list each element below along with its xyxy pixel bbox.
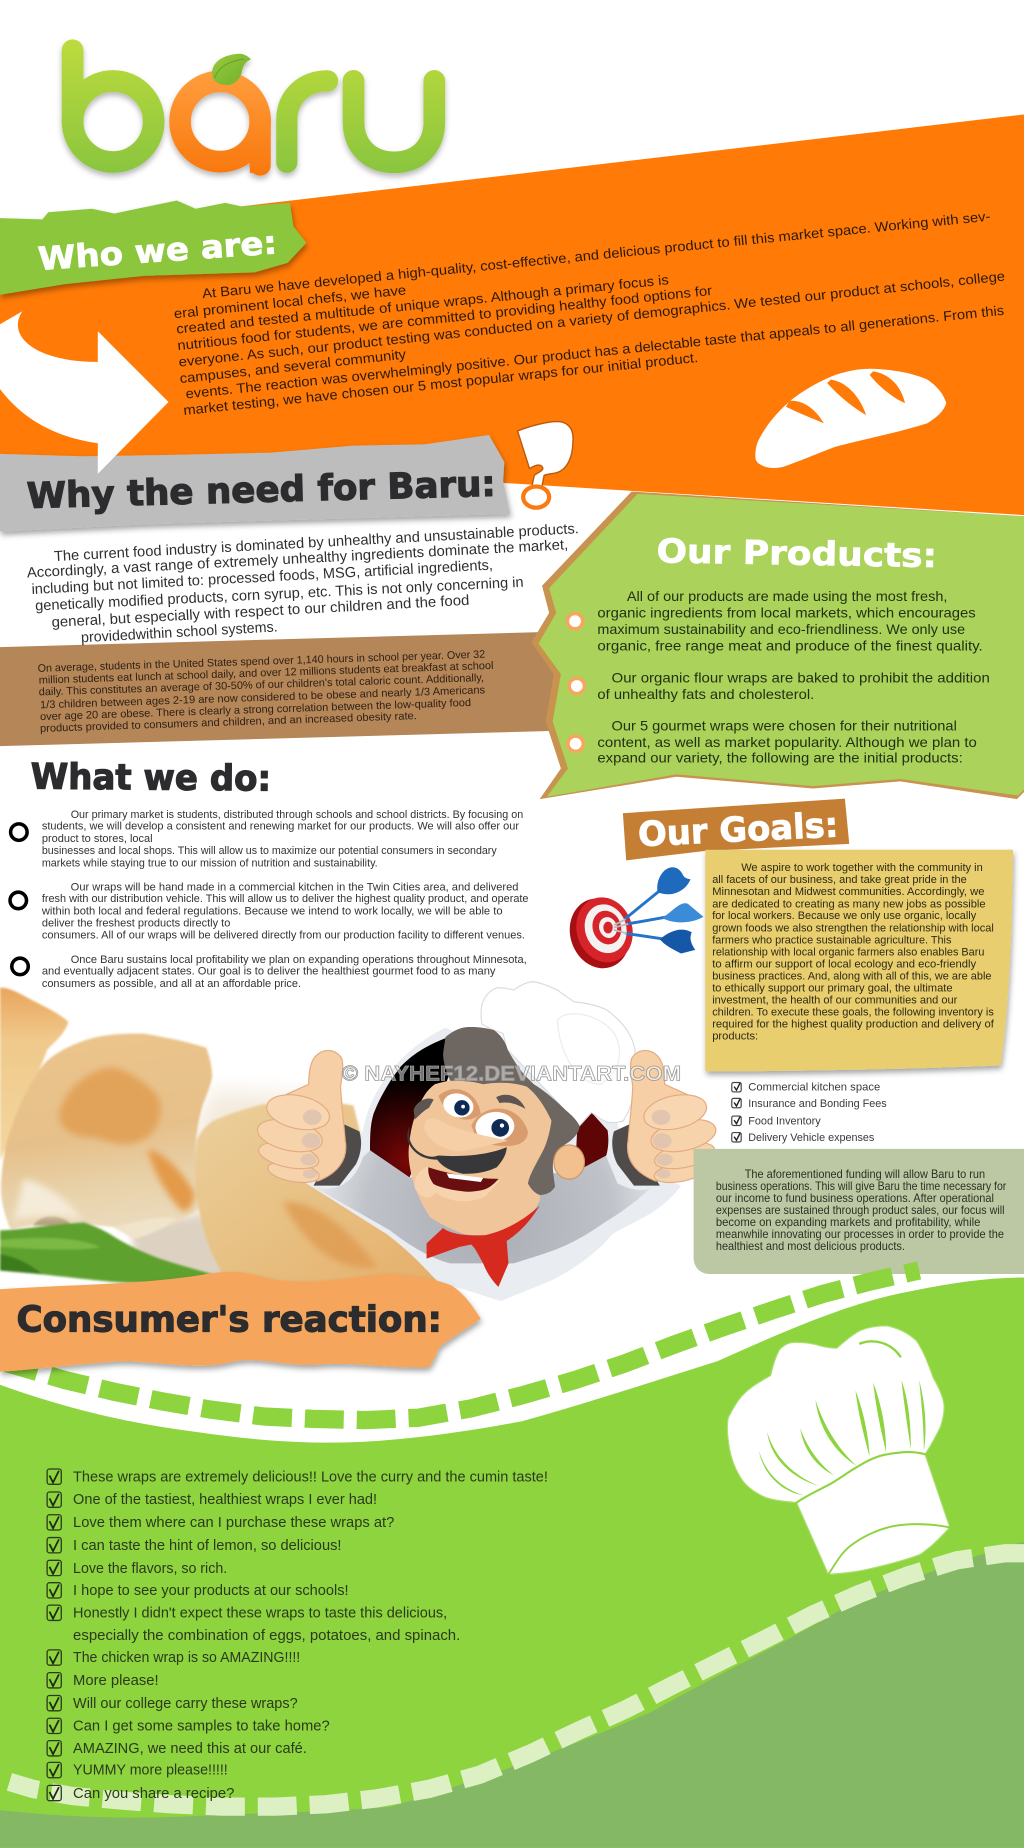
- text block: products body: Our 5 gourmet wraps were chosen for their nutritional: [612, 718, 957, 734]
- panel: funding note: [694, 1149, 1024, 1274]
- logo: Baru: [73, 50, 434, 173]
- panel: funding note: expenses are sustained through product sales, our focus will: [716, 1204, 1005, 1217]
- green dashed stitching: [0, 1270, 919, 1420]
- checklist: consumer quotes: Love them where can I purchase these wraps at?: [73, 1515, 394, 1531]
- heading: our products: Our Products:: [656, 531, 937, 575]
- checklist: consumer quotes: Love the flavors, so rich.: [73, 1561, 227, 1577]
- text block: who we are body: campuses, and several community: [179, 347, 407, 386]
- checklist: consumer quotes: YUMMY more please!!!!!: [73, 1763, 228, 1779]
- text block: products body: organic ingredients from local markets, which encourages: [597, 605, 976, 621]
- icon: chef hat: [727, 1326, 950, 1574]
- soft plate background: [130, 1090, 448, 1285]
- wrap two: [1, 1034, 212, 1237]
- text block: what we do body: businesses and local shops. This will allow us to maximize our potential consumers in secondary: [42, 845, 497, 857]
- heading tag: who we are: Who we are:: [37, 223, 278, 278]
- text block: products body: content, as well as market popularity. Although we plan to: [597, 734, 977, 750]
- lower dark green swoosh: [0, 1541, 1024, 1848]
- icon: bread loaf: [755, 369, 946, 468]
- chef hat: [481, 982, 635, 1126]
- panel: our goals note: all facets of our business, and take great pride in the: [712, 874, 967, 886]
- chef eyebrows: [414, 1095, 526, 1120]
- panel: brown statistics band: over age 20 are obese. There is clearly a strong correlation between the low-quality food: [40, 697, 471, 723]
- panel: funding note: meanwhile innovating our processes in order to provide the: [716, 1228, 1004, 1241]
- checklist: inventory: Delivery Vehicle expenses: [748, 1132, 875, 1144]
- text block: products body: All of our products are made using the most fresh,: [627, 588, 947, 604]
- text block: why the need body: providedwithin school systems.: [81, 619, 278, 646]
- panel: brown statistics band: products provided to consumers and children, and an increased obesity rate.: [40, 710, 417, 735]
- spinach leaf: [0, 1222, 217, 1283]
- panel: our goals note: to affirm our support of local ecology and eco-friendly: [712, 958, 976, 970]
- text block: products body: maximum sustainability and eco-friendliness. We only use: [597, 621, 965, 637]
- chef face: [409, 1077, 554, 1235]
- chef body halo: [304, 1028, 681, 1301]
- text block: why the need body: genetically modified products, corn syrup, etc. This is not only concerning in: [35, 575, 524, 615]
- heading: what we do: What we do:: [31, 756, 271, 800]
- panel: our goals note: We aspire to work together with the community in: [741, 862, 983, 874]
- browned patches on the wraps: [14, 1068, 377, 1268]
- checklist: inventory: Commercial kitchen space: [748, 1082, 880, 1094]
- panel: consumer's reaction wave: [0, 1270, 1024, 1848]
- heading tag: why the need for Baru: Why the need for Baru:: [26, 464, 496, 517]
- text block: who we are body: everyone. As such, our product testing was conducted on a variety of demographics. We tested our product at schools, college: [178, 269, 1006, 370]
- panel: our products: [531, 492, 1024, 799]
- panel: our goals note: to ethically support our primary goal, the ultimate: [712, 983, 953, 995]
- text block: who we are body: [173, 209, 1006, 418]
- text block: what we do body: Our wraps will be hand made in a commercial kitchen in the Twin Cities area, and delivered: [71, 881, 518, 893]
- text block: products body: expand our variety, the following are the initial products:: [597, 750, 963, 766]
- text block: what we do body: [41, 809, 528, 990]
- text block: products body: Our organic flour wraps are baked to prohibit the addition: [612, 669, 990, 685]
- text block: who we are body: events. The reaction was overwhelmingly positive. Our product has a delectable taste that appeals to all generations. From this: [185, 303, 1005, 401]
- checklist: inventory: Food Inventory: [748, 1115, 821, 1127]
- icon: white curved arrow: [0, 311, 169, 474]
- panel: our goals note: [705, 850, 1013, 1071]
- bullet rings: what we do: [10, 824, 28, 975]
- checklist: consumer quotes: especially the combination of eggs, potatoes, and spinach.: [73, 1628, 460, 1644]
- text block: what we do body: product to stores, local: [42, 833, 153, 845]
- heading tag: who we are: [0, 200, 306, 295]
- wrap one: [0, 988, 68, 1161]
- panel: funding note: become on expanding markets and profitability, while: [716, 1216, 980, 1229]
- panel: funding note: healthiest and most delicious products.: [716, 1240, 905, 1253]
- chef ear: [554, 1145, 584, 1179]
- left thumbs-up hand: [254, 1050, 361, 1186]
- panel: our goals note: are dedicated to creating as many new jobs as possible: [712, 898, 986, 910]
- icon: question mark: [518, 422, 573, 508]
- text block: what we do body: Our primary market is students, distributed through schools and school districts. By focusing on: [71, 809, 523, 821]
- checklist: consumer quotes: One of the tastiest, healthiest wraps I ever had!: [73, 1492, 377, 1508]
- panel: our goals note: Minnesotan and Midwest communities. Accordingly, we: [712, 886, 984, 898]
- text block: what we do body: consumers. All of our wraps will be delivered directly from our production facility to different venues.: [42, 930, 525, 942]
- checklist: inventory: [732, 1082, 887, 1144]
- text block: what we do body: within both local and federal regulations. Because we intend to work locally, we will be able to: [41, 906, 503, 918]
- panel: funding note: our income to fund business operations. After operational: [716, 1192, 994, 1205]
- pale dashed stitching: [9, 1553, 1024, 1807]
- text block: what we do body: markets while staying true to our mission of nutrition and sustainability.: [42, 857, 378, 869]
- panel: brown statistics band: [0, 632, 560, 746]
- panel: our goals note: products:: [712, 1031, 758, 1043]
- checklist: inventory: Insurance and Bonding Fees: [748, 1098, 887, 1110]
- text block: who we are body: nutritious food for students, we are committed to providing healthy food options for: [177, 283, 713, 353]
- text block: what we do body: Once Baru sustains local profitability we plan on expanding operations throughout Minnesota,: [71, 954, 527, 966]
- heading tag: consumer's reaction: Consumer's reaction:: [16, 1300, 442, 1341]
- checklist: consumer quotes: I can taste the hint of lemon, so delicious!: [73, 1538, 341, 1554]
- panel: our goals note: for local workers. Because we only use organic, locally: [712, 910, 976, 922]
- checklist: consumer quotes: Can I get some samples to take home?: [73, 1719, 330, 1735]
- panel: funding note: The aforementioned funding will allow Baru to run: [745, 1168, 985, 1181]
- right thumbs-up hand: [612, 1050, 719, 1186]
- checklist: consumer quotes: [47, 1469, 548, 1802]
- text block: products body: [597, 588, 990, 766]
- chef eye sockets: [438, 1089, 528, 1146]
- checklist: consumer quotes: I hope to see your products at our schools!: [73, 1583, 349, 1599]
- panel: brown statistics band: million students eat lunch at school daily, and over 12 millions students eat breakfast at school: [39, 660, 494, 687]
- panel: our goals note: investment, the health of our communities and our: [712, 994, 957, 1006]
- checklist: consumer quotes: The chicken wrap is so AMAZING!!!!: [73, 1650, 300, 1666]
- text block: what we do body: students, we will develop a consistent and renewing market for our products. We will also offer our: [42, 821, 519, 833]
- checklist: consumer quotes: Honestly I didn't expect these wraps to taste this delicious,: [73, 1605, 447, 1621]
- chef eyes: [441, 1090, 516, 1143]
- checklist: consumer quotes: More please!: [73, 1673, 159, 1689]
- icon: target with darts: [561, 867, 703, 976]
- heading tag: why the need for Baru: [0, 435, 510, 532]
- text block: what we do body: and eventually adjacent states. Our goal is to deliver the healthiest gourmet food to as many: [42, 966, 496, 978]
- checklist: consumer quotes: Will our college carry these wraps?: [73, 1696, 298, 1712]
- chef hair: [443, 1027, 580, 1195]
- wrap three: [195, 1102, 454, 1287]
- panel: our goals note: children. To execute these goals, the following inventory is: [712, 1007, 994, 1019]
- text block: what we do body: deliver the freshest products directly to: [42, 917, 230, 929]
- chef neckerchief: [427, 1206, 540, 1287]
- text block: why the need body: Accordingly, a vast range of extremely unhealthy ingredients dominate the market,: [26, 537, 569, 582]
- text block: why the need body: The current food industry is dominated by unhealthy and unsustainable products.: [54, 521, 579, 565]
- panel: our goals note: farmers who practice sustainable agriculture. This: [712, 934, 952, 946]
- checklist: consumer quotes: AMAZING, we need this at our café.: [73, 1741, 307, 1757]
- text block: what we do body: consumers as possible, and all at an affordable price.: [42, 978, 301, 990]
- text block: why the need body: [26, 521, 579, 646]
- illustration: chef giving thumbs up: [254, 982, 719, 1301]
- text block: why the need body: general, but especially with respect to our children and the food: [51, 593, 470, 631]
- panel: our goals note: relationship with local organic farmers also enables Baru: [712, 947, 984, 959]
- panel: brown statistics band: daily. This constitutes an average of 30-50% of our children's total caloric count. Additionally,: [39, 672, 484, 698]
- checklist: consumer quotes: Can you share a recipe?: [73, 1786, 234, 1802]
- panel: who we are (orange band): [0, 114, 1024, 515]
- heading tag: our goals: Our Goals:: [637, 805, 839, 855]
- heading tag: consumer's reaction: [0, 1272, 481, 1372]
- chef mouth: [415, 1167, 500, 1201]
- text block: products body: of unhealthy fats and cholesterol.: [597, 686, 814, 702]
- chef mustache: [407, 1127, 507, 1174]
- text block: who we are body: market testing, we have chosen our 5 most popular wraps for our initial product.: [183, 350, 699, 418]
- checklist: consumer quotes: These wraps are extremely delicious!! Love the curry and the cumin taste!: [73, 1469, 548, 1485]
- text block: what we do body: fresh with our distribution vehicle. This will allow us to deliver the highest quality product, and operate: [42, 893, 528, 905]
- panel: brown statistics band: 1/3 children between ages 2-19 are now considered to be obese and nearly 1/3 Americans: [40, 684, 486, 711]
- panel: brown statistics band: On average, students in the United States spend over 1,140 hours in school per year. Over 32: [37, 649, 485, 675]
- text block: products body: organic, free range meat and produce of the finest quality.: [597, 638, 983, 654]
- text block: who we are body: created and tested a multitude of unique wraps. Although a primary focus is: [176, 272, 670, 337]
- photo: baked wraps: [0, 988, 454, 1287]
- watermark: © NAYHEF12.DEVIANTART.COM: [342, 1063, 681, 1086]
- chef nose: [424, 1118, 508, 1151]
- panel: our goals note: required for the highest quality production and delivery of: [712, 1018, 995, 1030]
- oven hole background: [370, 1038, 608, 1177]
- chef shirt: [313, 1150, 650, 1263]
- text block: who we are body: At Baru we have developed a high-quality, cost-effective, and delicious product to fill this market space. Working with sev-: [202, 209, 991, 301]
- text block: who we are body: eral prominent local chefs, we have: [173, 282, 407, 321]
- bullet markers: [567, 614, 584, 751]
- text block: why the need body: including but not limited to: processed foods, MSG, artificial ingredients,: [31, 557, 493, 598]
- panel: our goals note: grown foods we also strengthen the relationship with local: [712, 922, 994, 934]
- panel: our goals note: business practices. And, along with all of this, we are able: [712, 971, 991, 983]
